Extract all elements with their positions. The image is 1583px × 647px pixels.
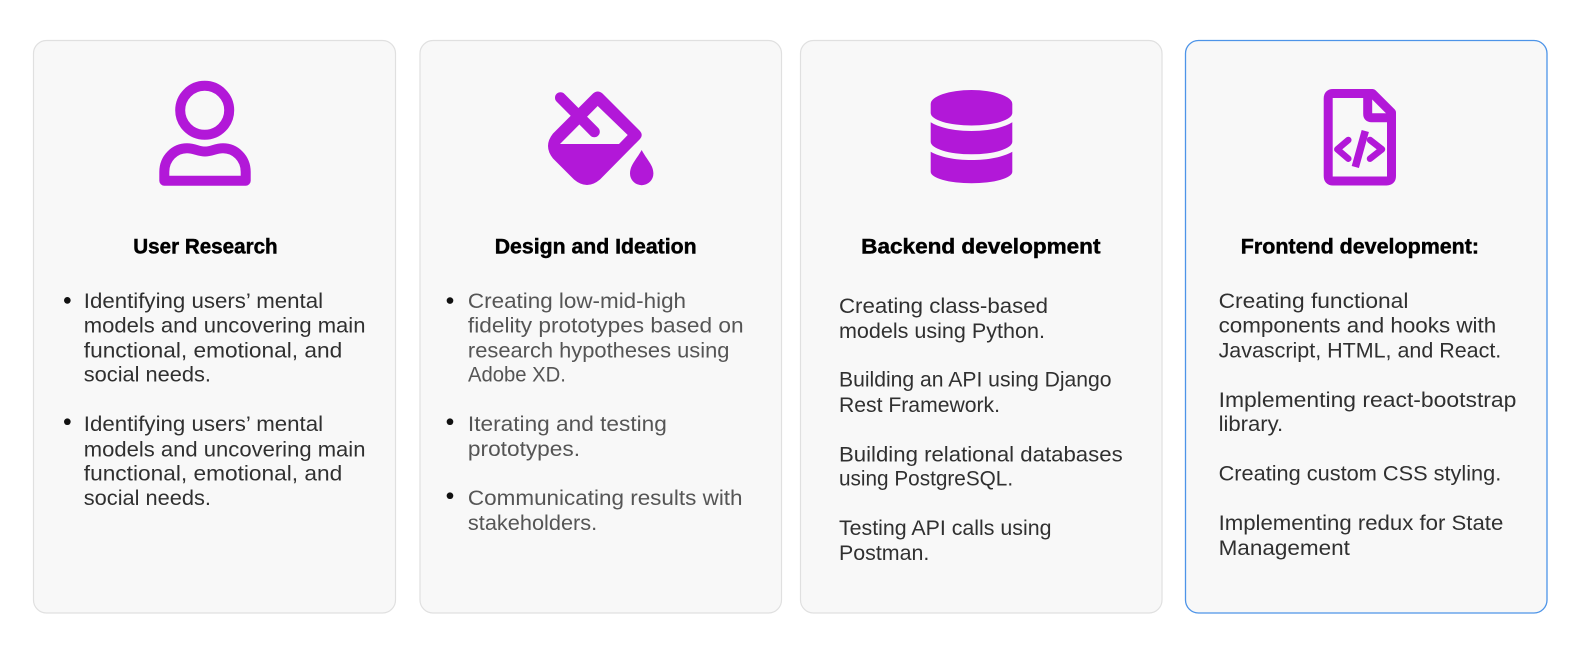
- text block: Implementing redux for State: [1219, 510, 1503, 535]
- text block: Implementing react-bootstrap: [1219, 387, 1516, 412]
- bullet list: functional, emotional, and: [84, 337, 342, 362]
- bullet list: research hypotheses using: [468, 337, 729, 362]
- text block: Building relational databases: [839, 441, 1123, 466]
- text block: Creating functional: [1219, 288, 1408, 313]
- text block: [1219, 288, 1516, 560]
- text block: Creating class-based: [839, 293, 1048, 318]
- text block: Postman.: [839, 540, 929, 565]
- text block: Management: [1219, 535, 1350, 560]
- bullet list: Communicating results with: [468, 485, 743, 510]
- bullet list: stakeholders.: [468, 510, 597, 535]
- bullet list: social needs.: [84, 485, 211, 510]
- panel: Backend development: [800, 40, 1162, 613]
- bullet list: functional, emotional, and: [84, 461, 342, 486]
- card background: [34, 40, 396, 613]
- panel: User Research: [34, 40, 396, 613]
- text block: Testing API calls using: [839, 515, 1051, 540]
- bullet list: Creating low-mid-high: [468, 288, 686, 313]
- text block: components and hooks with: [1219, 313, 1496, 338]
- text block: [839, 293, 1123, 565]
- bullet list: prototypes.: [468, 436, 580, 461]
- card background: [420, 40, 782, 613]
- bullet list: [64, 288, 365, 510]
- bullet list: models and uncovering main: [84, 436, 365, 461]
- heading: Design and Ideation: [495, 235, 697, 258]
- icon: code file: [1328, 94, 1392, 181]
- panel: Frontend development: [1186, 40, 1547, 613]
- text block: Creating custom CSS styling.: [1219, 461, 1501, 486]
- card background: [1186, 40, 1547, 613]
- text block: using PostgreSQL.: [839, 466, 1013, 491]
- bullet list: Identifying users’ mental: [84, 411, 323, 436]
- bullet list: social needs.: [84, 362, 211, 387]
- text block: library.: [1219, 411, 1283, 436]
- heading: Frontend development:: [1241, 235, 1479, 258]
- text block: Building an API using Django: [839, 367, 1112, 392]
- heading: User Research: [133, 235, 278, 258]
- heading: Backend development: [861, 235, 1100, 258]
- bullet list: fidelity prototypes based on: [468, 313, 744, 338]
- text block: models using Python.: [839, 318, 1045, 343]
- card background: [800, 40, 1162, 613]
- bullet list: Identifying users’ mental: [84, 288, 323, 313]
- bullet list: [447, 288, 744, 535]
- icon: user: [164, 86, 246, 181]
- bullet list: Iterating and testing: [468, 411, 667, 436]
- text block: Rest Framework.: [839, 392, 1000, 417]
- panel: Design and Ideation: [420, 40, 782, 613]
- text block: Javascript, HTML, and React.: [1219, 337, 1501, 362]
- bullet list: models and uncovering main: [84, 313, 365, 338]
- icon: database: [931, 90, 1012, 183]
- bullet list: Adobe XD.: [468, 362, 566, 387]
- icon: paint bucket: [548, 92, 653, 185]
